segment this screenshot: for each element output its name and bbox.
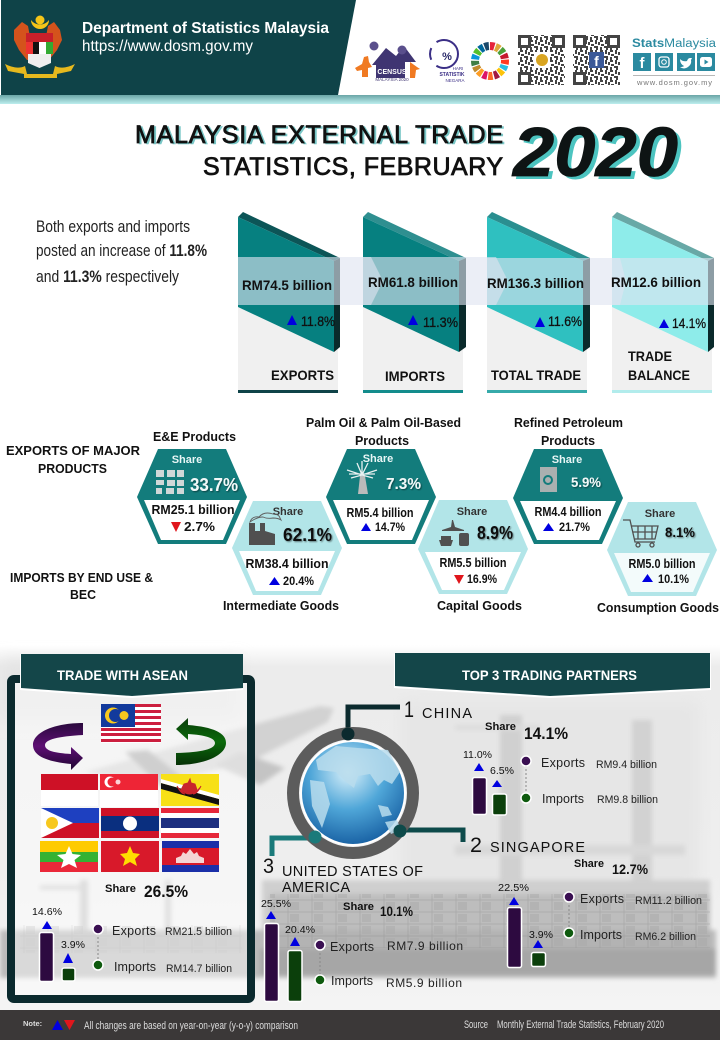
partner: United States of America: RM5.9 billion: [386, 976, 462, 990]
icon: green arrow: [176, 718, 226, 765]
partner: United States of America: Share: [343, 901, 374, 913]
partner: China: 1: [404, 697, 414, 722]
icon: QR code facebook: [573, 35, 620, 85]
flag: Malaysia: [101, 704, 161, 743]
bar chart: ASEAN: 3.9%: [61, 940, 85, 951]
partner: China: CHINA: [422, 706, 472, 722]
flag: Laos: [101, 808, 159, 838]
hexagon: E&E products: Share: [172, 454, 202, 466]
flag: Indonesia: [41, 774, 98, 806]
partner: China: RM9.8 billion: [597, 794, 658, 806]
hexagon: palm oil: 14.7%: [375, 520, 405, 534]
bar chart: ASEAN: [32, 907, 85, 982]
icon: hari statistik negara: [430, 40, 465, 83]
values: headline figures: RM12.6 billion: [611, 274, 701, 290]
footer: [0, 1010, 720, 1040]
partner: Singapore: Exports: [580, 892, 624, 906]
partner: Singapore: SINGAPORE: [490, 840, 585, 856]
hexagon: refined petroleum: Refined Petroleum: [514, 415, 623, 430]
title: [135, 113, 682, 194]
icon: electronics: [156, 470, 184, 494]
intro text: and 11.3% respectively: [36, 267, 179, 286]
hexagon: refined petroleum: 5.9%: [571, 474, 602, 490]
partner: United States of America: 10.1%: [380, 903, 413, 919]
legend: ASEAN exports and imports: RM14.7 billion: [166, 963, 232, 975]
hexagon: palm oil: Palm Oil & Palm Oil-Based: [306, 415, 461, 430]
values: headline figures: 11.8%: [301, 313, 335, 329]
icon: purple arrow: [33, 723, 83, 770]
imports by end use label: BEC: [70, 587, 97, 602]
legend: ASEAN exports and imports: RM21.5 billion: [165, 926, 232, 938]
exports of major products label: PRODUCTS: [38, 461, 107, 476]
flag: Singapore: [100, 774, 158, 807]
hexagon: intermediate goods: Share: [273, 506, 303, 518]
hexagon: capital goods: 8.9%: [477, 523, 513, 543]
flag: Myanmar: [40, 841, 98, 872]
flag: Cambodia: [162, 841, 219, 872]
icon: census logo: CENSUS: [377, 69, 407, 76]
values: headline figures: RM136.3 billion: [487, 275, 584, 291]
legend: ASEAN exports and imports: [93, 924, 232, 975]
hexagon: refined petroleum: Share: [552, 454, 582, 466]
partner: Singapore: 3.9%: [529, 930, 553, 941]
hexagon: palm oil: Products: [355, 433, 409, 448]
title: MALAYSIA EXTERNAL TRADE: [137, 122, 505, 150]
bar chart: ASEAN: 14.6%: [32, 907, 62, 918]
panel: trade balance: BALANCE: [628, 367, 690, 383]
flag: Thailand: [161, 808, 219, 838]
partner: United States of America: AMERICA: [282, 880, 350, 896]
panel: trade with ASEAN: [11, 654, 251, 999]
ASEAN share: Share: [105, 883, 136, 895]
hexagon: consumption goods: [597, 502, 719, 615]
title: MALAYSIA EXTERNAL TRADE: [135, 121, 503, 149]
values: headline figures: 11.6%: [548, 313, 582, 329]
exports of major products label: [6, 443, 141, 476]
hexagon: intermediate goods: [223, 501, 342, 613]
panel: trade balance: TRADE: [628, 348, 672, 364]
background photo: plane and port: [0, 645, 720, 1010]
social block: StatsMalaysia: [632, 38, 717, 87]
hexagon: consumption goods: 8.1%: [665, 524, 696, 540]
values: headline figures: RM74.5 billion: [242, 277, 332, 293]
partner: China: [404, 697, 658, 815]
icon: QR code website: [518, 35, 565, 85]
values: headline figures: 14.1%: [672, 315, 706, 331]
partner: United States of America: 25.5%: [261, 899, 291, 910]
flag: Vietnam: [101, 841, 159, 872]
title: 2020: [511, 113, 678, 191]
partner: Singapore: 22.5%: [498, 883, 529, 894]
partner: Singapore: RM11.2 billion: [635, 895, 702, 907]
hexagon: consumption goods: Share: [645, 508, 675, 520]
partner: China: Exports: [541, 756, 585, 770]
partner: United States of America: 20.4%: [285, 925, 315, 936]
hexagon: capital goods: Share: [457, 506, 487, 518]
icon: hari statistik negara: STATISTIK: [439, 72, 465, 78]
intro text: [36, 217, 207, 286]
hexagon: consumption goods: RM5.0 billion: [628, 557, 696, 571]
panel: total trade: TOTAL TRADE: [491, 367, 581, 383]
partner: China: Share: [485, 721, 516, 733]
hexagon: intermediate goods: Intermediate Goods: [223, 598, 339, 613]
social block: StatsMalaysia: Stats Malaysia: [632, 38, 717, 50]
icon: coat of arms: [5, 16, 75, 78]
partner: Singapore: 2: [470, 834, 482, 857]
partner: United States of America: RM7.9 billion: [387, 939, 463, 953]
icon: hari statistik negara: %: [442, 51, 452, 63]
icon: census logo: [355, 42, 420, 82]
values: headline figures: 11.3%: [423, 314, 458, 330]
partner: Singapore: Imports: [580, 928, 622, 942]
hexagon: refined petroleum: 21.7%: [559, 520, 590, 534]
hexagon: intermediate goods: 62.1%: [283, 525, 332, 545]
panel: exports: [238, 212, 340, 393]
hexagon: intermediate goods: 20.4%: [283, 574, 314, 588]
icon: factory: [249, 513, 281, 545]
partner: China: 14.1%: [524, 724, 568, 743]
imports by end use label: IMPORTS BY END USE &: [10, 570, 153, 585]
social block: StatsMalaysia: f: [640, 55, 646, 72]
hexagon: capital goods: RM5.5 billion: [440, 556, 506, 570]
panel: trade balance: [612, 212, 714, 393]
partner: China: 11.0%: [463, 750, 492, 761]
footer: All changes are based on year-on-year (y-o-y) comparison: [84, 1020, 298, 1032]
footer: Note:: [23, 1019, 42, 1028]
hexagon: capital goods: Capital Goods: [437, 598, 522, 613]
hexagon: E&E products: 33.7%: [190, 475, 238, 495]
partner: United States of America: [261, 855, 463, 1002]
hexagon: E&E products: E&E Products: [153, 429, 236, 444]
header title: https://www.dosm.gov.my: [82, 38, 253, 55]
partner: China: RM9.4 billion: [596, 759, 657, 771]
heading: top 3 trading partners: [394, 653, 711, 698]
partner: China: 6.5%: [490, 766, 514, 777]
flow arrows band: [238, 257, 714, 305]
title: STATISTICS, FEBRUARY: [203, 153, 503, 181]
ASEAN share: [105, 882, 188, 901]
intro text: Both exports and imports: [36, 217, 190, 236]
partner: United States of America: UNITED STATES OF: [282, 864, 423, 880]
partner: United States of America: 3: [263, 855, 274, 878]
partner: United States of America: Imports: [331, 974, 373, 988]
heading: top 3 trading partners: TOP 3 TRADING PARTNERS: [462, 667, 637, 683]
globe with connectors: [272, 707, 463, 856]
values: headline figures: RM61.8 billion: [368, 274, 458, 290]
hexagon: E&E products: 2.7%: [184, 520, 215, 534]
hexagon: capital goods: [418, 500, 528, 613]
partner: Singapore: RM6.2 billion: [635, 931, 696, 943]
ASEAN share: 26.5%: [144, 882, 188, 901]
hexagon: palm oil: 7.3%: [386, 476, 421, 493]
panel: exports: EXPORTS: [271, 367, 334, 383]
partner: Singapore: Share: [574, 858, 604, 870]
values: headline figures: [242, 274, 706, 331]
title: 2020: [515, 116, 682, 194]
icon: palm tree: [347, 461, 377, 494]
icon: plane ship truck: [439, 520, 469, 546]
legend: ASEAN exports and imports: Imports: [114, 960, 156, 974]
hexagon: capital goods: 16.9%: [467, 572, 497, 586]
partner: China: Imports: [542, 792, 584, 806]
hexagon: consumption goods: 10.1%: [658, 572, 689, 586]
icon: hari statistik negara: NEGARA: [445, 78, 465, 83]
hexagon: E&E products: RM25.1 billion: [152, 502, 235, 517]
icon: shopping cart: [623, 520, 658, 547]
imports by end use label: [10, 570, 153, 602]
hexagon: palm oil: RM5.4 billion: [346, 506, 414, 520]
icon: QR code facebook: f: [594, 53, 599, 69]
flag: Philippines: [41, 808, 99, 838]
legend: ASEAN exports and imports: Exports: [112, 924, 156, 938]
hexagon: refined petroleum: RM4.4 billion: [534, 505, 602, 519]
icon: oil barrel: [540, 467, 557, 492]
partner: United States of America: Exports: [330, 940, 374, 954]
panel: total trade: [487, 212, 590, 393]
hexagon: intermediate goods: RM38.4 billion: [246, 556, 329, 571]
icon: SDG wheel: [469, 40, 511, 82]
footer: Source: [464, 1019, 488, 1031]
partner: Singapore: [470, 834, 702, 968]
hexagon: palm oil: Share: [363, 453, 393, 465]
icon: hari statistik negara: HARI: [453, 66, 463, 71]
icon: census logo: MALAYSIA 2020: [375, 77, 409, 82]
hexagon: refined petroleum: Products: [541, 433, 595, 448]
header title: [82, 20, 329, 55]
header title: Department of Statistics Malaysia: [82, 20, 329, 37]
panel: imports: [363, 212, 466, 393]
intro text: posted an increase of 11.8%: [36, 241, 207, 260]
hexagon: E&E products: [137, 429, 247, 544]
header band: [0, 0, 720, 104]
flag: Brunei: [161, 774, 219, 806]
exports of major products label: EXPORTS OF MAJOR: [6, 443, 141, 458]
partner: Singapore: 12.7%: [612, 861, 648, 877]
social block: StatsMalaysia: www.dosm.gov.my: [636, 78, 712, 87]
panel: imports: IMPORTS: [385, 368, 445, 384]
hexagon: refined petroleum: [513, 415, 623, 544]
panel: trade with ASEAN: TRADE WITH ASEAN: [57, 667, 188, 683]
hexagon: palm oil: [306, 415, 461, 544]
